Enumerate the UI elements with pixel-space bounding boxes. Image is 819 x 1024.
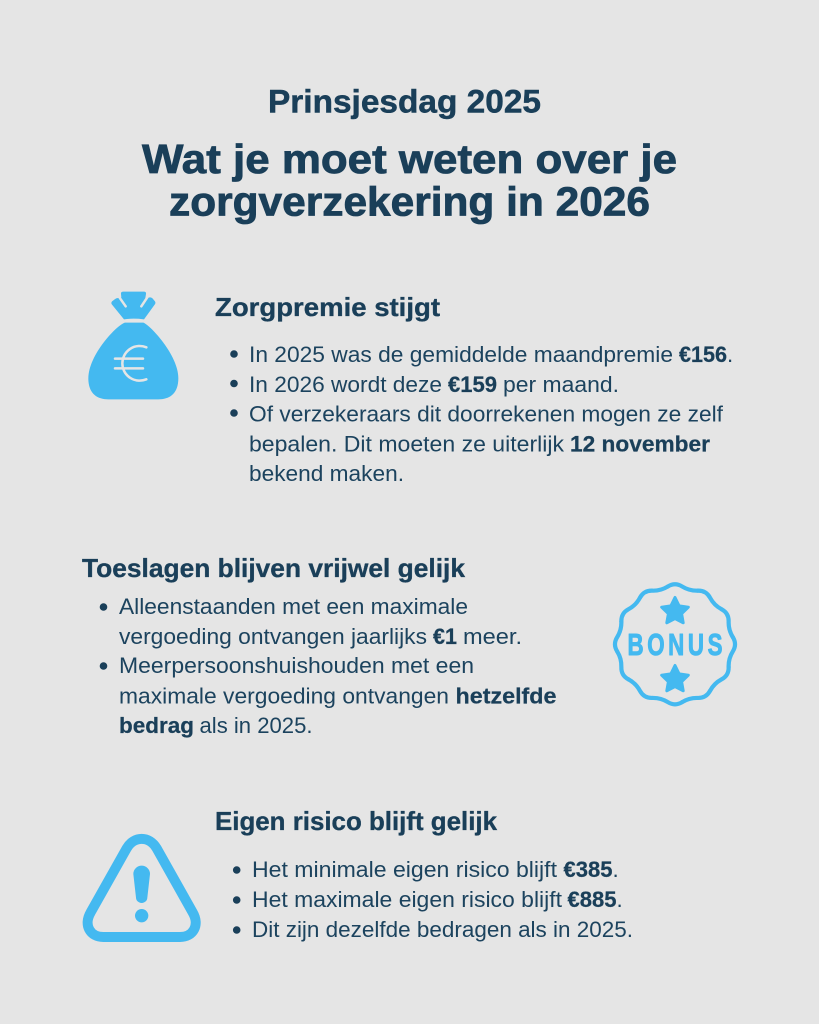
title block [142,84,677,224]
bullet list: Alleenstaanden met een maximale [119,594,468,619]
bullet list: Het minimale eigen risico blijft [252,857,558,882]
bullet list: maximale vergoeding ontvangen [119,684,449,708]
bullet list: als in 2025. [200,713,312,738]
heading: Zorgpremie stijgt [215,292,440,322]
bullet list: €159 [448,372,497,397]
bullet list: meer. [463,624,522,649]
icon: warning triangle [88,839,196,937]
bullet list [230,342,733,486]
panel: zorgpremie [215,292,733,486]
bullet list: Het maximale eigen risico blijft [252,887,563,912]
bullet list: Dit zijn dezelfde bedragen als in 2025. [252,917,633,942]
bullet list: €385 [564,857,612,882]
heading: Eigen risico blijft gelijk [215,806,498,836]
bullet list: hetzelfde [456,684,556,708]
heading: Toeslagen blijven vrijwel gelijk [82,553,466,583]
bullet list: €1 [433,624,457,649]
bullet list: €156 [679,342,727,367]
bullet list: bepalen. Dit moeten ze uiterlijk [249,432,565,456]
bullet list: bedrag [119,713,194,738]
bullet list [100,594,556,738]
icon: bonus badge: BONUS [628,627,726,662]
icon: money bag [88,292,178,399]
bullet list: . [612,857,619,882]
subtitle: Prinsjesdag 2025 [268,84,541,120]
icon: bonus badge [612,581,738,708]
panel: toeslagen [82,553,556,738]
main title line 1: Wat je moet weten over je [142,136,677,182]
bullet list: vergoeding ontvangen jaarlijks [119,624,427,649]
bullet list: bekend maken. [249,461,404,486]
bullet list: In 2026 wordt deze [249,372,442,397]
bullet list: . [616,887,623,912]
bullet list: In 2025 was de gemiddelde maandpremie [249,342,673,367]
bullet list: Of verzekeraars dit doorrekenen mogen ze zelf [249,402,724,426]
bullet list: 12 november [570,432,710,456]
bullet list: €885 [568,887,616,912]
bullet list: . [727,342,733,367]
bullet list: Meerpersoonshuishouden met een [119,653,474,678]
bullet list: per maand. [503,372,619,397]
panel: eigen risico [215,806,633,942]
main title line 2: zorgverzekering in 2026 [169,178,650,224]
bullet list [233,857,633,942]
